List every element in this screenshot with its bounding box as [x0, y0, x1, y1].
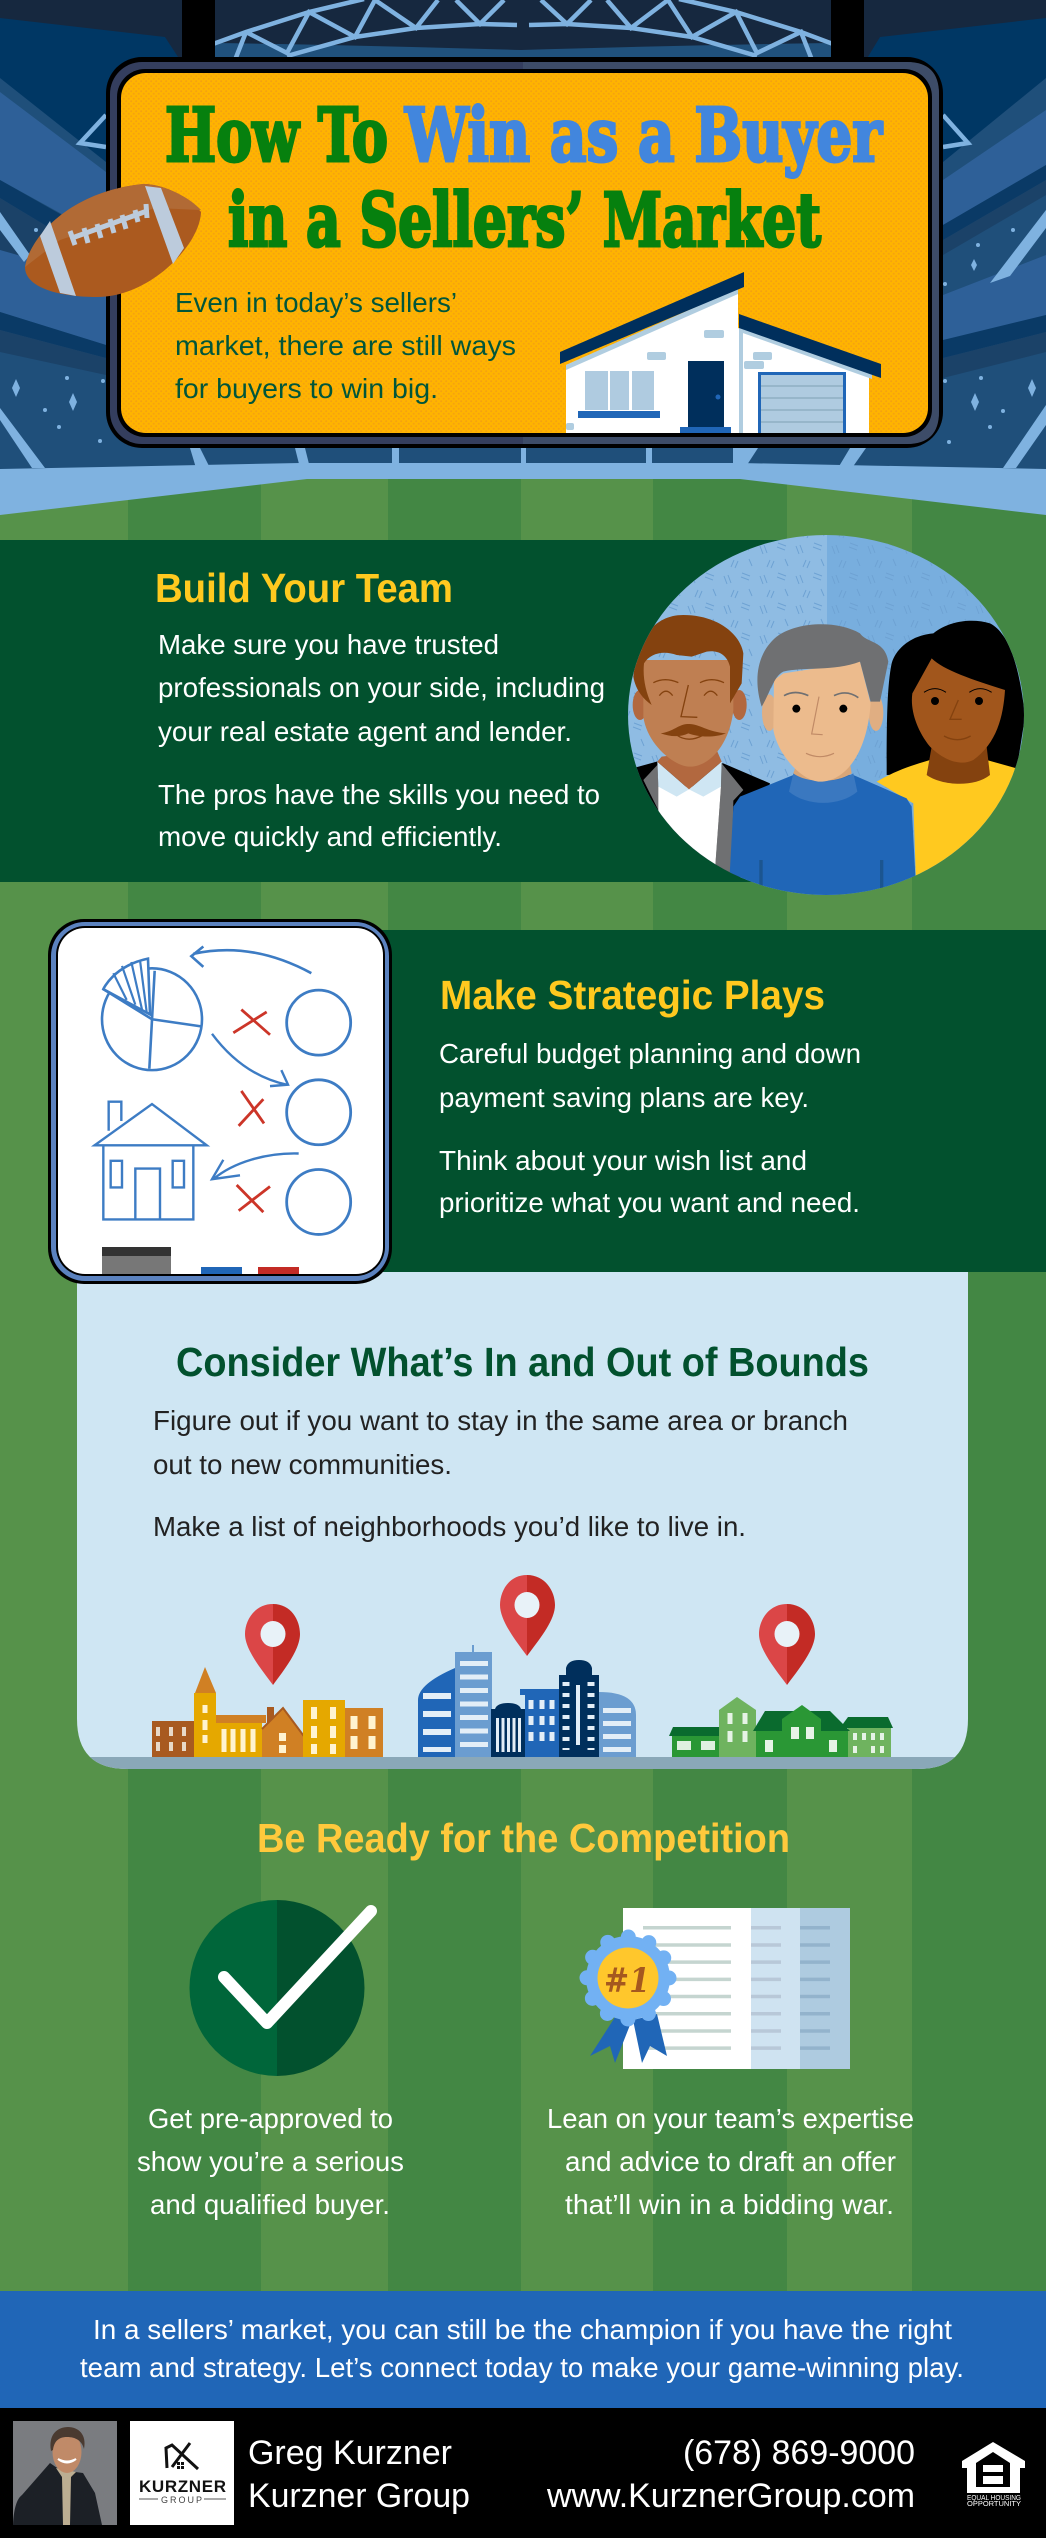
body text: build your team: Make sure you have trusted [158, 629, 499, 660]
equal housing logo [962, 2442, 1025, 2508]
scoreboard posts [182, 0, 864, 60]
body text: make strategic plays: Careful budget planning and down [439, 1038, 861, 1069]
contact name: Greg Kurzner [248, 2434, 452, 2472]
body text: build your team: professionals on your side, including [158, 672, 605, 703]
text: pre-approval [137, 2103, 404, 2220]
body text: bounds: Make a list of neighborhoods you’d like to live in. [153, 1511, 746, 1542]
panel: in and out of bounds [77, 1272, 968, 1769]
whiteboard markers [201, 1267, 299, 1274]
intro text: Even in today’s sellers’ [175, 287, 457, 318]
equal housing logo: OPPORTUNITY [967, 2501, 1021, 2508]
contact name: Kurzner Group [248, 2477, 470, 2515]
icon: map pin center [500, 1575, 555, 1656]
whiteboard eraser [102, 1247, 171, 1274]
icon: map pin left [245, 1604, 300, 1685]
text: expert advice [547, 2103, 914, 2220]
icon: house [560, 272, 881, 433]
body text: bounds [153, 1405, 848, 1542]
ribbon badge [586, 1936, 670, 2063]
heading: be ready for the competition: Be Ready for the Competition [257, 1815, 790, 1861]
intro text: for buyers to win big. [175, 373, 438, 404]
heading: make strategic plays: Make Strategic Plays [440, 972, 825, 1018]
icon: checkmark [190, 1900, 371, 2076]
title: Win as a Buyer [404, 93, 883, 179]
footer bar [0, 2408, 1046, 2538]
contact details [546, 2434, 915, 2515]
icon: town buildings [152, 1667, 383, 1757]
equal housing logo: EQUAL HOUSING [967, 2495, 1021, 2502]
icon: map pin right [759, 1604, 815, 1685]
title [165, 93, 883, 264]
scoreboard panel [106, 57, 943, 448]
text: pre-approval: Get pre-approved to [148, 2103, 393, 2134]
company logo: GROUP [161, 2495, 202, 2505]
grass field stripes [0, 470, 1046, 2291]
icon: football [25, 184, 201, 297]
contact details: (678) 869-9000 [683, 2434, 915, 2472]
ribbon badge: #1 [604, 1961, 650, 2001]
stadium background [0, 0, 1046, 470]
body text: build your team: The pros have the skills you need to [158, 779, 600, 810]
title: in a Sellers’ Market [228, 178, 821, 264]
icon: suburban houses [669, 1697, 893, 1757]
body text: bounds: out to new communities. [153, 1449, 452, 1480]
stadium roof truss [213, 0, 833, 60]
text: expert advice: Lean on your team’s expertise [547, 2103, 914, 2134]
icon: offer document with ribbon [586, 1908, 850, 2069]
body text: build your team: move quickly and efficiently. [158, 821, 502, 852]
body text: build your team [158, 629, 605, 852]
company logo [130, 2421, 234, 2525]
body text: build your team: your real estate agent and lender. [158, 716, 572, 747]
heading: build your team: Build Your Team [155, 565, 453, 611]
closing text [80, 2314, 964, 2383]
body text: make strategic plays: prioritize what you want and need. [439, 1187, 860, 1218]
ground strip [77, 1757, 968, 1769]
floor and grass edge [0, 463, 1046, 515]
side truss triangles [80, 115, 968, 147]
contact name [248, 2434, 470, 2515]
title: How To [165, 93, 388, 179]
panel: make strategic plays [380, 930, 1046, 1272]
panel: build your team [0, 530, 1037, 900]
text: pre-approval: show you’re a serious [137, 2146, 404, 2177]
body text: bounds: Figure out if you want to stay in the same area or branch [153, 1405, 848, 1436]
illustration: three people [620, 530, 1037, 900]
text: pre-approval: and qualified buyer. [150, 2189, 390, 2220]
intro text: market, there are still ways [175, 330, 516, 361]
company logo: KURZNER [139, 2477, 226, 2496]
icon: city buildings [418, 1645, 636, 1757]
contact details: www.KurznerGroup.com [546, 2477, 915, 2515]
text: expert advice: that’ll win in a bidding war. [565, 2189, 894, 2220]
agent photo [13, 2421, 117, 2525]
body text: make strategic plays: Think about your wish list and [439, 1145, 807, 1176]
heading: bounds: Consider What’s In and Out of Bounds [176, 1339, 869, 1385]
closing text: team and strategy. Let’s connect today to make your game-winning play. [80, 2352, 964, 2383]
text: expert advice: and advice to draft an offer [565, 2146, 896, 2177]
panel: closing message [0, 2291, 1046, 2408]
closing text: In a sellers’ market, you can still be the champion if you have the right [93, 2314, 952, 2345]
body text: make strategic plays [439, 1038, 861, 1218]
body text: make strategic plays: payment saving plans are key. [439, 1082, 809, 1113]
intro text [175, 287, 516, 404]
whiteboard play diagram [48, 919, 392, 1284]
